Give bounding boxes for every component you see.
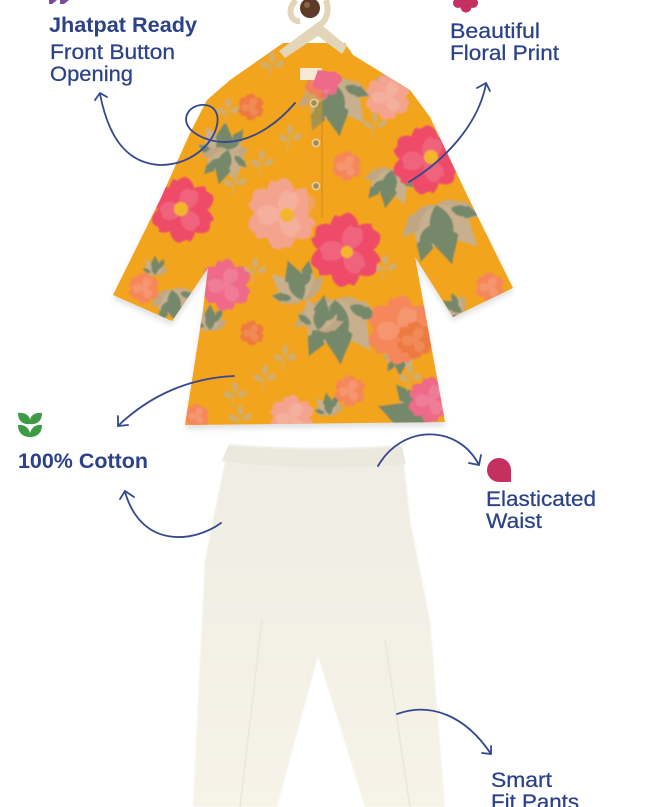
pants <box>193 444 445 807</box>
arrow: kurta to cotton <box>118 376 234 426</box>
heading: 100% Cotton: 100% Cotton <box>18 450 148 473</box>
label: Elasticated Waist: Elasticated <box>486 488 596 511</box>
arrow: floral print <box>409 83 490 182</box>
icon: green leaves <box>18 413 42 437</box>
label: Beautiful Floral Print <box>450 20 559 65</box>
kurta <box>113 43 513 467</box>
label: Front Button Opening: Front Button <box>50 41 175 64</box>
label: Smart Fit Pants: Smart <box>491 769 552 792</box>
icon: crimson flower <box>453 0 478 12</box>
collar <box>314 64 336 72</box>
label: Elasticated Waist: Waist <box>486 510 542 533</box>
icon: purple chevrons <box>49 0 69 4</box>
label: Beautiful Floral Print: Beautiful <box>450 20 540 43</box>
label: Beautiful Floral Print: Floral Print <box>450 42 559 65</box>
kurta shadow <box>113 201 513 429</box>
label: Elasticated Waist <box>486 488 596 533</box>
floral print <box>128 52 505 425</box>
arrow: smart fit pants <box>397 710 491 754</box>
leaves <box>298 78 370 137</box>
hanger <box>279 0 347 58</box>
arrow: front button <box>95 93 295 165</box>
flowers <box>148 125 463 288</box>
placket <box>306 78 322 218</box>
label: Front Button Opening: Opening <box>50 63 133 86</box>
label: Front Button Opening <box>50 41 175 86</box>
arrow: elasticated waist <box>378 434 481 466</box>
buttons <box>310 99 320 190</box>
sprigs <box>252 365 278 391</box>
heading: Jhatpat Ready: Jhatpat Ready <box>49 14 197 37</box>
label: Smart Fit Pants <box>491 769 579 807</box>
arrow: pants to cotton <box>120 491 221 537</box>
icon: crimson drop <box>487 458 511 482</box>
